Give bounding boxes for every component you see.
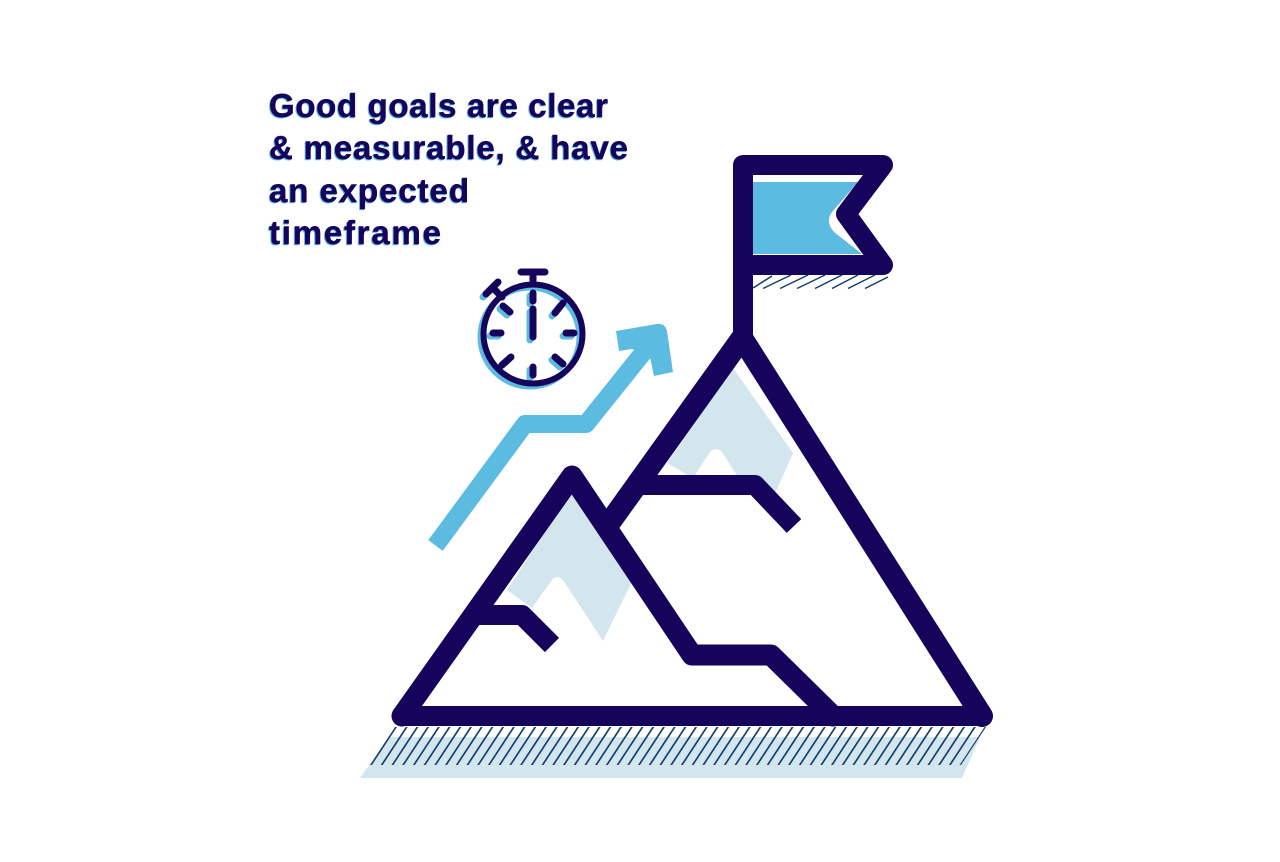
ridge line: large peak	[637, 485, 794, 526]
mountain: base line	[402, 706, 982, 726]
heading: good goals text: & measurable, & have	[269, 129, 628, 166]
flag hatching	[753, 275, 888, 288]
heading: good goals text: an expected	[269, 172, 469, 209]
flag and pole outline	[743, 165, 883, 340]
ground shadow band	[360, 737, 980, 778]
snow shading: large peak	[667, 368, 793, 505]
stopwatch blue offset shadow	[480, 285, 580, 386]
ground hatching	[370, 727, 986, 765]
flag fill	[752, 182, 862, 254]
mountain: large peak	[608, 338, 982, 716]
arrow: rising trend	[436, 324, 673, 546]
ridge line: small peak	[470, 615, 552, 645]
heading: good goals text	[269, 87, 628, 251]
mountain: small peak	[402, 476, 833, 716]
icon: stopwatch	[480, 272, 582, 386]
heading: good goals text: timeframe	[269, 214, 441, 251]
heading: good goals text: Good goals are clear	[269, 87, 608, 124]
stopwatch navy outline	[484, 272, 582, 384]
snow shading: small peak	[507, 490, 640, 641]
